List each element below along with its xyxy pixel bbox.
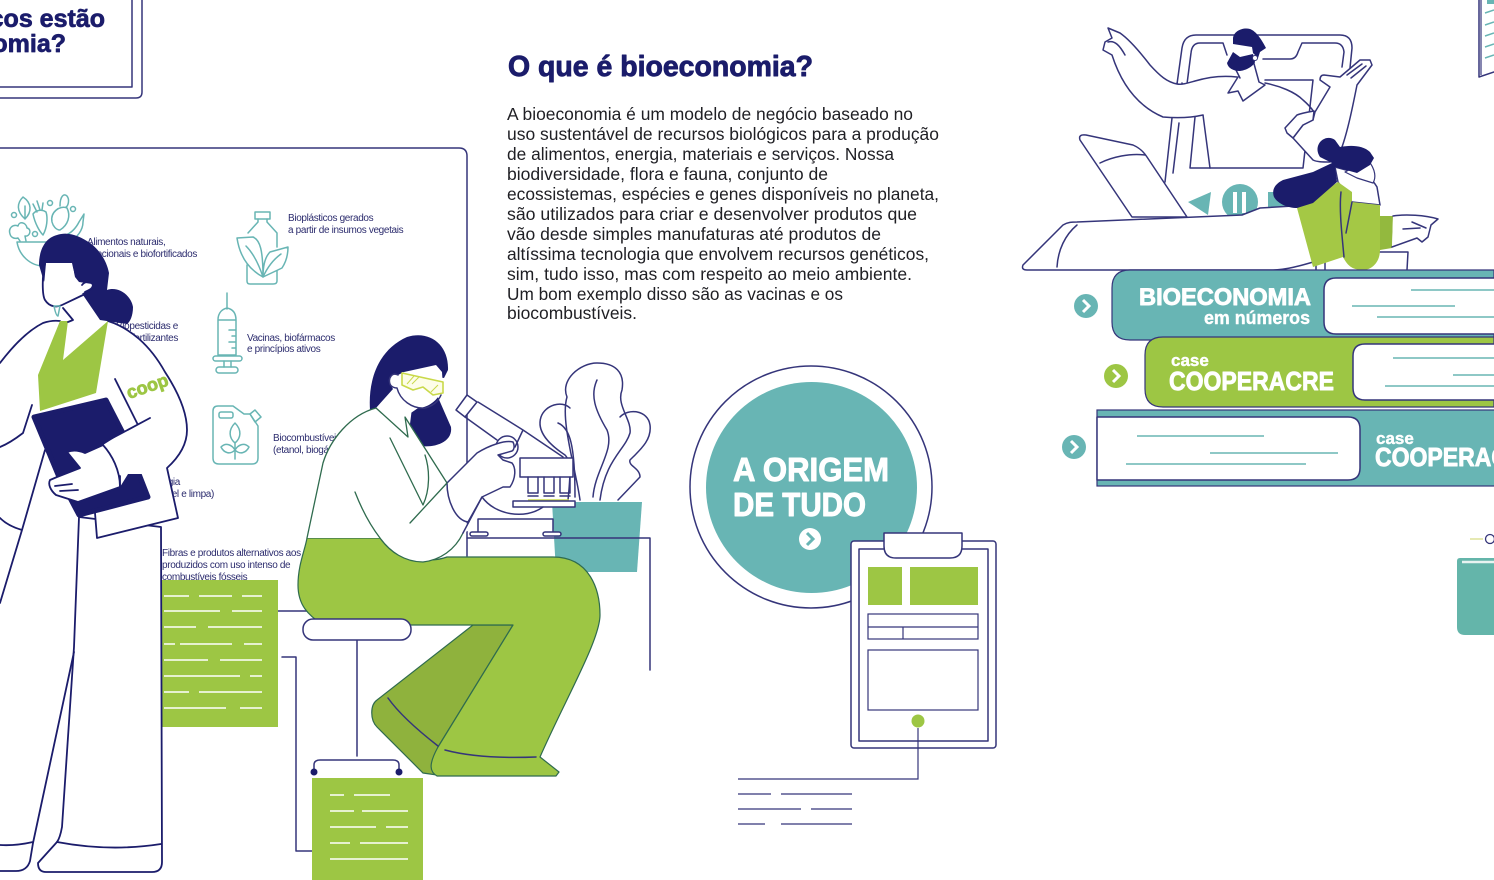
woman hair [1273,138,1374,208]
hair [370,335,448,410]
book: case Cooperacre: COOPERACRE [1169,366,1334,396]
button: A origem de tudo: A ORIGEM [733,451,889,488]
man right arm [1293,60,1372,162]
text block: definition [507,104,939,323]
book: case Cooperar: case [1376,429,1414,448]
labels: application captions: a partir de insumos vegetais [288,225,404,236]
icon: biofuel jug [213,406,261,464]
text block: definition: altíssima tecnologia que envolvem recursos genéticos, [507,244,929,264]
text block: definition: Um bom exemplo disso são as vacinas e os [507,284,843,304]
book: case Cooperacre: case [1171,351,1209,370]
labels: application captions: Bioplásticos gerados [288,213,374,224]
plant pot [552,502,642,572]
icon: bioplastic bottle with leaves [237,212,288,284]
text block: definition: uso sustentável de recursos biológicos para a produção [507,124,939,144]
labels: application captions: biofertilizantes [120,333,178,344]
text block: definition: sim, tudo isso, mas com respeito ao meio ambiente. [507,264,912,284]
book: Bioeconomia em números: em números [1204,308,1310,328]
woman hand [1392,215,1438,247]
hair [39,234,133,324]
stool seat [303,619,411,640]
labels: application captions: Energia [148,477,181,488]
labels: application captions: e princípios ativos [247,344,321,355]
clipboard [34,400,148,515]
illustration: video presenter and viewer [1022,28,1438,271]
player controls [1188,184,1290,220]
labels: application captions: funcionais e biofortificados [89,249,197,260]
lab coat [0,321,187,538]
torso [307,408,470,562]
icon: salad bowl [10,195,84,266]
icon: syringe [213,293,242,373]
video player frame [1177,35,1352,84]
heading: O que é bioeconomia? [508,51,813,83]
labels: application captions: (etanol, biogás) [273,445,336,456]
back leg [372,625,513,775]
top-right document fragment [1479,0,1494,77]
labels: application captions: Alimentos naturais, [87,237,165,248]
icon: chevron [799,528,821,550]
labels: application captions: (renovável e limpa) [136,489,214,500]
pants [298,538,600,776]
woman desk edge [1316,252,1408,271]
labels: application captions: Biopesticidas e [116,321,179,332]
text block: definition: biocombustíveis. [507,303,637,323]
button: A origem de tudo: DE TUDO [733,486,866,523]
text block: definition: A bioeconomia é um modelo de negócio baseado no [507,104,913,124]
labels: application captions [87,213,404,583]
plant leaves [565,363,630,500]
microscope [456,395,575,536]
button: A origem de tudo [690,366,932,608]
arm and hand [49,445,120,502]
connector lines [278,611,320,851]
book: Bioeconomia em números: BIOECONOMIA [1139,284,1311,311]
face and neck [376,365,443,440]
text block: definition: de alimentos, energia, materiais e serviços. Nossa [507,144,894,164]
sleeve over clipboard [103,418,170,487]
right-edge book fragment [1457,534,1494,635]
text block: definition: são utilizados para criar e desenvolver produtos que [507,204,917,224]
man hair and beard [1233,28,1266,58]
laptop screen back [1080,135,1187,217]
figure: woman with clipboard [0,234,187,872]
labels: application captions: Biocombustíveis [273,433,341,444]
goggles [402,373,443,395]
vest [38,321,108,411]
figure: scientist at microscope [298,335,600,776]
coop sleeve logo: coop [124,370,171,403]
icon: chevron green [1104,364,1128,388]
trousers [38,517,162,872]
icon: chevron teal 1 [1074,294,1098,318]
labels: application captions: Vacinas, biofármacos [247,333,335,344]
illustration: clipboard [738,533,996,824]
man neck and collar [1228,60,1265,101]
sleeve and hand [447,442,515,522]
labels: application captions: produzidos com uso intenso de [162,560,291,571]
face [43,263,92,307]
labels: application captions: combustíveis fósseis [162,572,248,583]
icon: chevron teal 2 [1062,435,1086,459]
foreground arm cushion [1022,205,1320,270]
stool [310,640,402,776]
book: case Cooperar [1097,410,1494,486]
text block: definition: biodiversidade, flora e fauna, conjunto de [507,164,828,184]
text block: definition: vão desde simples manufaturas até produtos de [507,224,881,244]
text block: definition: ecossistemas, espécies e genes disponíveis no planeta, [507,184,939,204]
panel: bioeconomy applications [0,148,467,880]
book: case Cooperacre [1145,337,1494,407]
woman neck [1335,167,1380,205]
man face [1233,45,1254,58]
woman body [1297,182,1380,270]
screen rectangle [1190,80,1313,168]
desk with plant and microscope [456,363,650,670]
callout box: top-left question [0,0,142,98]
text block: green note 2 [312,778,423,880]
man shoulder [1265,83,1314,112]
text block: green note 1 [162,580,278,727]
book: Bioeconomia em números [1112,270,1494,340]
man left arm [1103,28,1237,118]
labels: application captions: Fibras e produtos alternativos aos [162,548,301,559]
desk line [467,538,650,670]
